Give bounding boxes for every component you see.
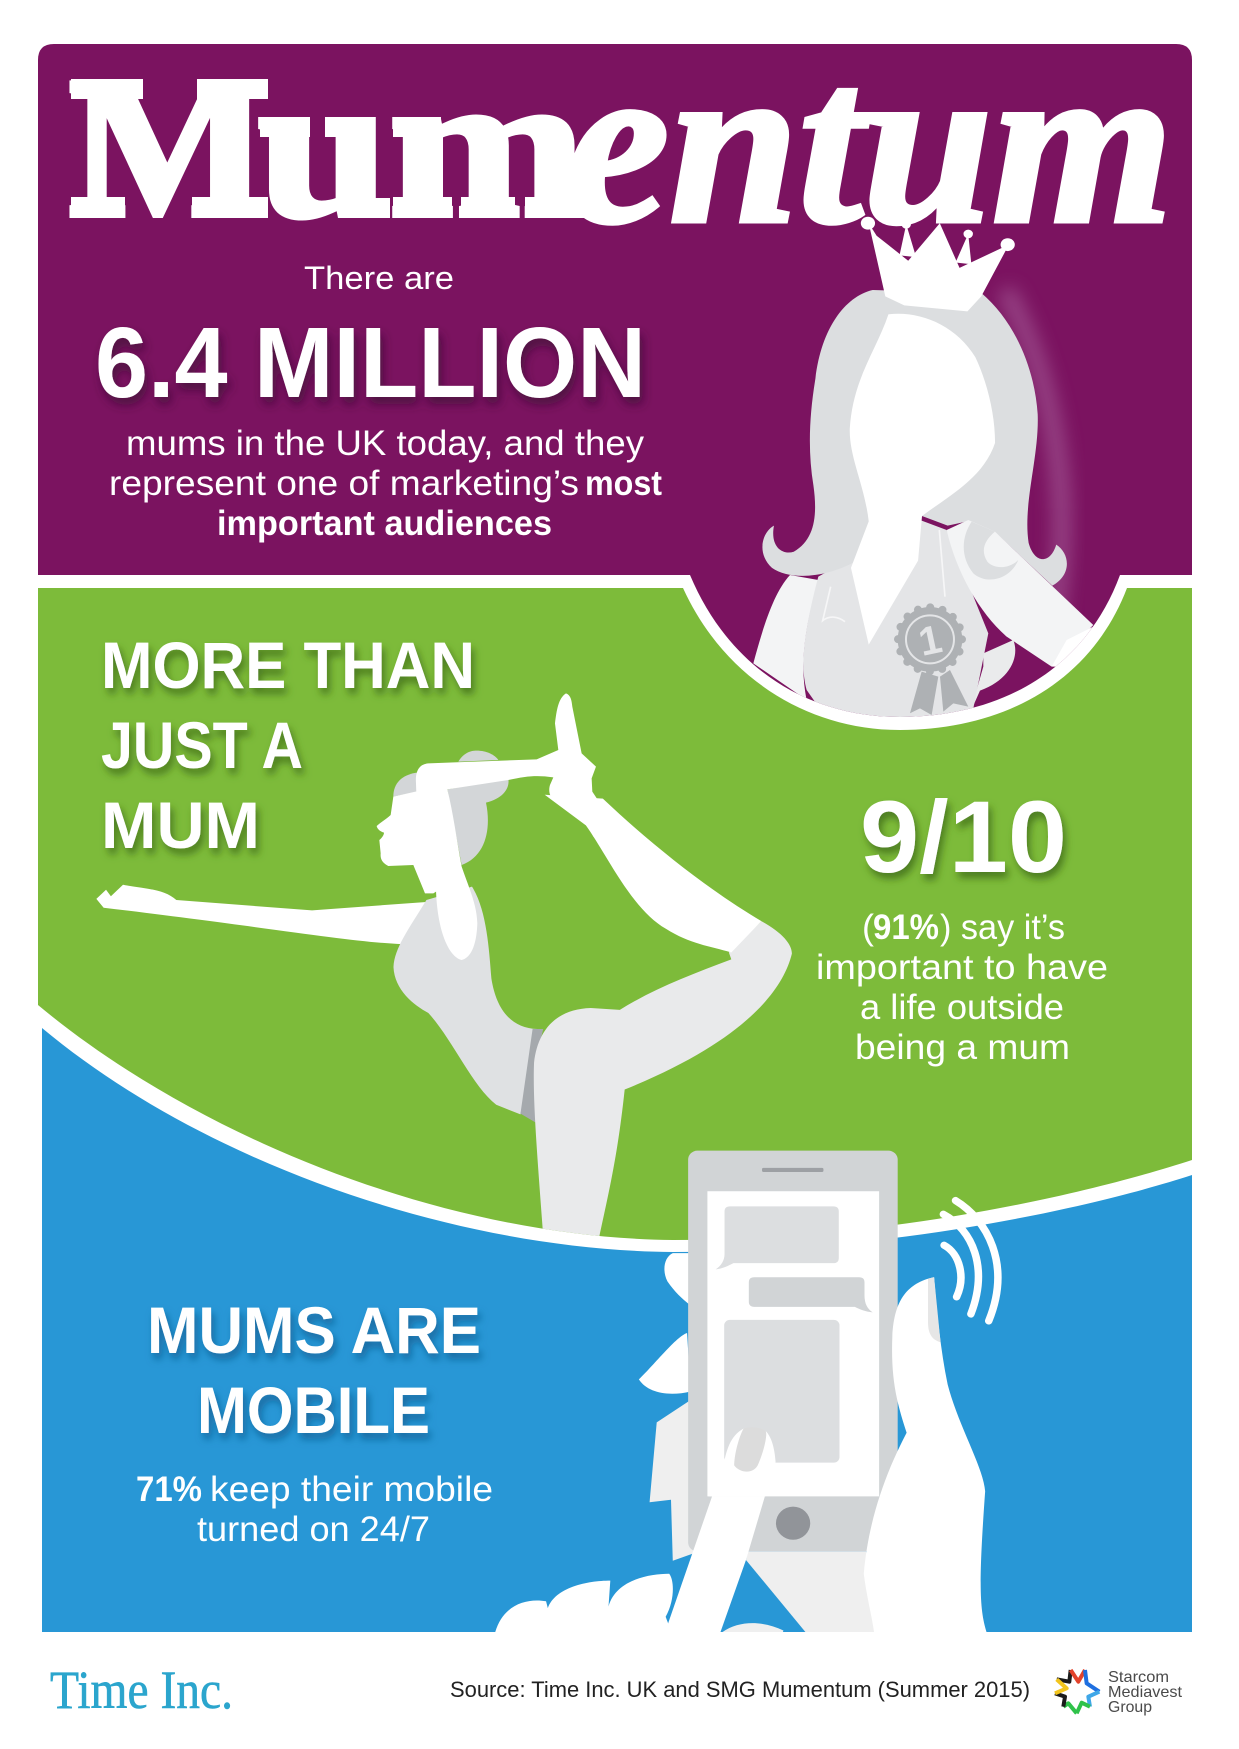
medal <box>898 607 968 715</box>
raised arm and foot <box>416 693 613 960</box>
face <box>376 792 436 894</box>
fingertip shade <box>734 1427 766 1472</box>
title slab serifs <box>71 79 584 218</box>
title: Mumentum: um <box>258 31 586 260</box>
hair <box>762 290 1067 586</box>
small triangle shade <box>720 1623 783 1636</box>
phone lower shade <box>746 1551 876 1636</box>
text: 91 percent: important to have <box>816 948 1108 987</box>
stat: 9/10: 9/10 <box>860 780 1067 894</box>
medal: 1 <box>915 617 946 665</box>
text: mums in the UK: mums in the UK today, and they <box>126 424 645 463</box>
stat: 6.4 million: 6.4 MILLION <box>95 307 646 419</box>
crown balls <box>861 217 1015 251</box>
logo: Starcom Mediavest Group <box>1108 1669 1183 1716</box>
text: There are: There are <box>304 260 454 296</box>
bun <box>458 751 498 762</box>
text: 71 percent <box>136 1470 493 1549</box>
pointing finger <box>664 1496 765 1636</box>
title: Mumentum: entum <box>566 15 1173 272</box>
panel: green section <box>38 588 1192 1240</box>
text: mums in the UK <box>109 424 662 543</box>
heading: mums are mobile: MOBILE <box>197 1373 430 1447</box>
text: 91 percent <box>816 908 1108 1067</box>
text: 91 percent: being a mum <box>855 1028 1070 1067</box>
heading: more than just a mum: MORE THAN <box>101 628 475 702</box>
left fingers behind phone <box>639 1253 691 1394</box>
right hand <box>864 1277 988 1636</box>
bracelet cuff <box>1052 627 1093 667</box>
shorts <box>520 1029 543 1123</box>
illustration: queen <box>753 217 1093 723</box>
home button <box>776 1507 810 1540</box>
thumb shade <box>928 1277 941 1342</box>
panel: purple header <box>38 44 1192 717</box>
torso <box>803 520 988 723</box>
arm crease <box>823 587 845 622</box>
raised leg <box>545 795 761 952</box>
text: 91 percent: a life outside <box>860 988 1064 1027</box>
standing leg and thigh <box>534 921 792 1243</box>
text: 91 percent: ) say it’s <box>940 908 1065 947</box>
logo: star mark <box>1055 1670 1099 1713</box>
phone body <box>688 1151 898 1551</box>
logo: Starcom Mediavest Group: Group <box>1108 1699 1152 1716</box>
text: mums in the UK: important audiences <box>217 504 552 543</box>
chat bubble 3 <box>724 1320 839 1463</box>
chat bubble 2 <box>749 1277 873 1312</box>
chest fold <box>939 530 945 597</box>
glow behind hair <box>1005 290 1062 640</box>
logo: Time Inc: Time Inc. <box>50 1660 233 1720</box>
crown back spires <box>900 228 972 264</box>
vibration arcs <box>943 1201 998 1321</box>
hair neck shadow <box>922 516 965 526</box>
heading: mums are mobile: MUMS ARE <box>147 1293 481 1367</box>
fingertip <box>708 1429 776 1496</box>
back hair curl <box>972 640 1016 708</box>
text: 91 percent: 91% <box>873 908 939 947</box>
torso <box>393 887 537 1114</box>
text: 91 percent: ( <box>862 908 874 947</box>
earpiece <box>762 1168 823 1172</box>
crown <box>869 223 1009 311</box>
heading: mums are mobile <box>147 1293 481 1447</box>
left shoulder <box>753 575 818 700</box>
illustration: phone and hands <box>494 1151 998 1636</box>
heading: more than just a mum <box>101 628 475 862</box>
logo: Starcom Mediavest Group: Mediavest <box>1108 1684 1183 1701</box>
left wrist <box>650 1400 694 1561</box>
heading: more than just a mum: JUST A <box>101 708 303 782</box>
logo: Starcom Mediavest Group: Starcom <box>1108 1669 1169 1686</box>
hair <box>447 778 509 865</box>
panel: blue section <box>42 1028 1192 1632</box>
lower body <box>753 520 1015 723</box>
hair curl on shoulder <box>964 522 1018 580</box>
text: 71 percent: 71% <box>136 1470 202 1509</box>
title: Mumentum <box>69 15 1173 272</box>
sash arm <box>947 520 1093 667</box>
fist knuckles <box>494 1574 673 1636</box>
heading: more than just a mum: MUM <box>101 788 260 862</box>
chat bubble 1 <box>716 1206 839 1269</box>
outstretched arm <box>96 885 426 944</box>
text: mums in the UK: represent one of marketing’s <box>109 464 579 503</box>
text: source: Source: Time Inc. UK and SMG Mumentum (Summer 2015) <box>450 1677 1030 1702</box>
illustration: yoga woman <box>96 693 792 1243</box>
text: 71 percent: turned on 24/7 <box>197 1510 430 1549</box>
text: mums in the UK: most <box>585 464 662 503</box>
screen <box>707 1191 879 1496</box>
face and neck <box>850 314 995 645</box>
title: Mumentum: M <box>69 37 270 259</box>
text: 71 percent: keep their mobile <box>210 1470 493 1509</box>
front hair <box>393 773 418 797</box>
